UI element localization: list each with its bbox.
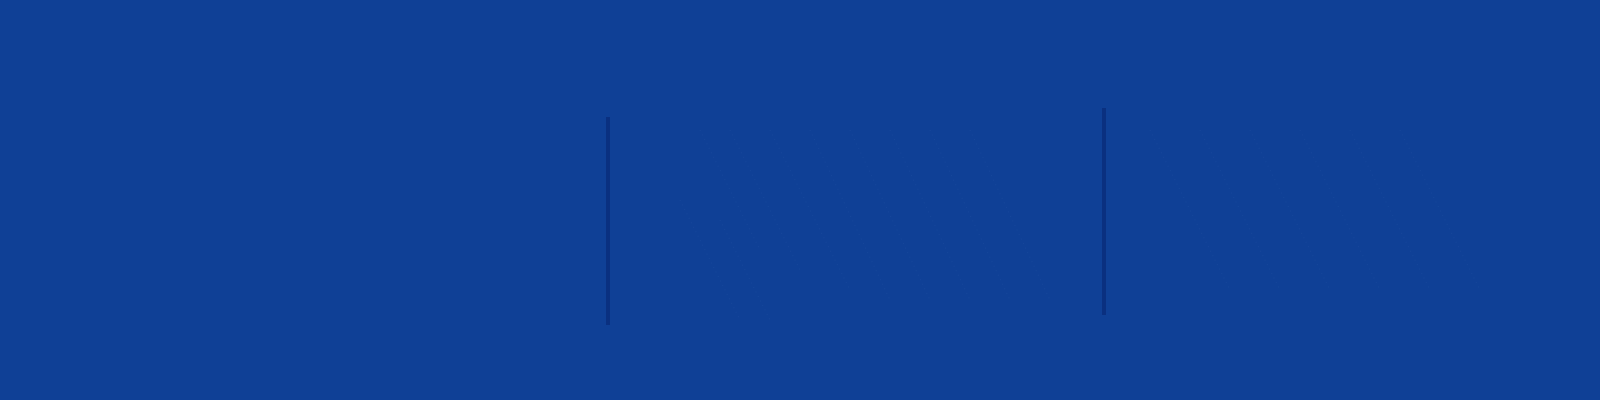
divider: left vertical line — [606, 117, 610, 325]
divider: right vertical line — [1102, 108, 1106, 315]
